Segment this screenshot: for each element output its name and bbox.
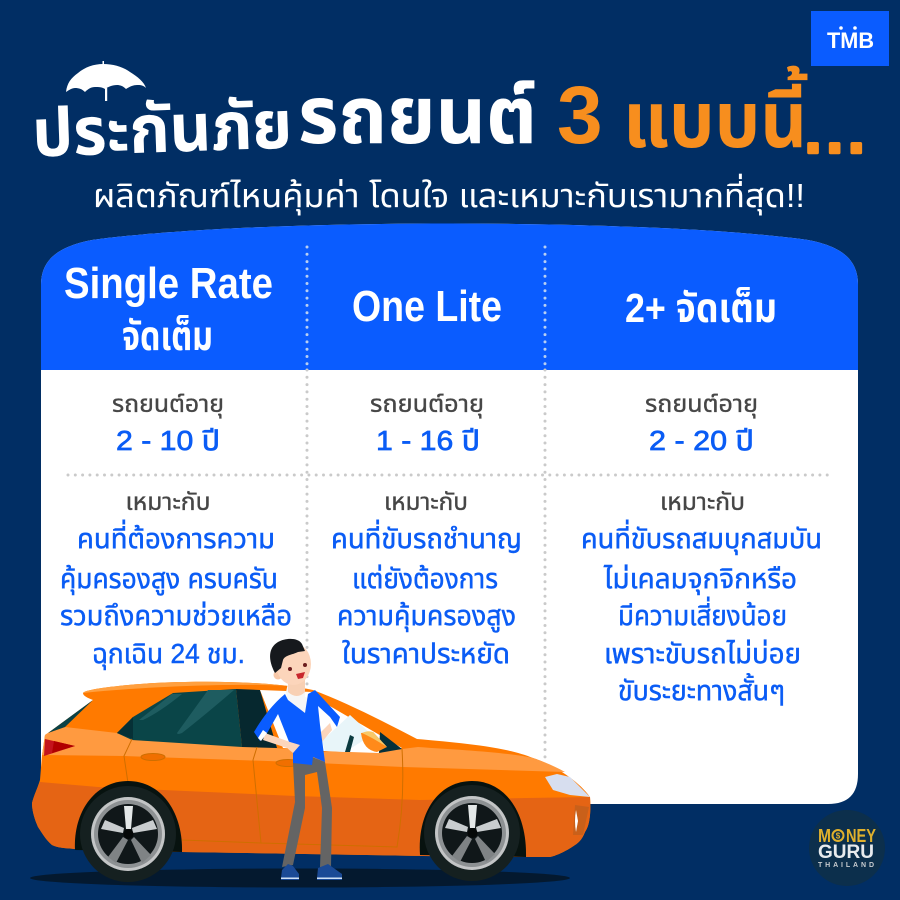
column 1 details: คุ้มครองสูง ครบครัน — [60, 563, 278, 596]
side windows — [117, 689, 402, 753]
column 2 details: รถยนต์อายุ — [370, 391, 484, 419]
logo: Money Guru Thailand — [809, 810, 885, 886]
rear wheel — [75, 781, 182, 882]
headlight — [545, 774, 590, 797]
column 2 details: แต่ยังต้องการ — [352, 563, 498, 594]
column 1 details: ฉุกเฉิน 24 ชม. — [92, 638, 245, 670]
column 2 details — [331, 391, 522, 669]
title: แบบนี้ — [623, 66, 808, 164]
column 2 details: ความคุ้มครองสูง — [337, 600, 516, 633]
side mirror — [361, 732, 387, 752]
left forearm and hand — [263, 733, 300, 753]
column 2 details: ในราคาประหยัด — [342, 638, 510, 669]
column heading: One Lite: One Lite — [352, 282, 502, 331]
title: 3 — [557, 70, 603, 161]
column 3 details: มีความเสี่ยงน้อย — [618, 596, 787, 631]
column 3 details: ขับระยะทางสั้นๆ — [618, 673, 785, 706]
column 3 details — [581, 391, 822, 706]
illustration: orange car — [32, 682, 590, 882]
jacket — [254, 690, 340, 765]
head — [274, 643, 311, 685]
column 1 details: 2 - 10 ปี — [116, 425, 220, 456]
logo: Money Guru Thailand: $ — [836, 832, 841, 840]
column 3 details: ไม่เคลมจุกจิกหรือ — [603, 563, 797, 595]
column 2 details: 1 - 16 ปี — [376, 425, 480, 456]
column 3 details: เพราะขับรถไม่บ่อย — [604, 638, 801, 669]
rear windshield — [48, 700, 93, 733]
column 3 details: รถยนต์อายุ — [645, 391, 758, 419]
logo: Money Guru Thailand: M — [818, 826, 831, 846]
panel: comparison table — [41, 224, 858, 804]
column heading: Single Rate: Single Rate — [64, 259, 273, 308]
column heading: Single Rate — [64, 259, 273, 359]
column 3 details: คนที่ขับรถสมบุกสมบัน — [581, 519, 822, 555]
illustration: man in blue jacket — [254, 639, 342, 880]
icon: umbrella — [66, 61, 146, 101]
right forearm — [320, 723, 332, 742]
front wheel — [420, 781, 526, 881]
subtitle: ผลิตภัณฑ์ไหนคุ้มค่า โดนใจ และเหมาะกับเรามากที่สุด!! — [93, 173, 805, 216]
title: ประกันภัย — [31, 87, 293, 172]
ground shadow — [30, 868, 570, 888]
column heading: Single Rate: จัดเต็ม — [122, 313, 213, 359]
column 3 details: 2 - 20 ปี — [649, 425, 754, 456]
column 1 details — [60, 391, 292, 670]
column 2 details: เหมาะกับ — [384, 489, 468, 516]
title — [31, 66, 870, 172]
column 1 details: รถยนต์อายุ — [112, 391, 224, 419]
hair — [270, 639, 305, 673]
door lines and handles — [124, 739, 403, 847]
logo: Money Guru Thailand: THAILAND — [818, 862, 874, 869]
column 2 details: คนที่ขับรถชำนาญ — [331, 519, 522, 554]
column 1 details: เหมาะกับ — [126, 489, 210, 516]
logo: TMB: TMB — [827, 28, 874, 53]
column 1 details: คนที่ต้องการความ — [77, 519, 275, 554]
title: รถยนต์ — [298, 71, 537, 160]
title: ... — [805, 100, 870, 166]
shoes — [281, 864, 342, 880]
column 3 details: เหมาะกับ — [660, 489, 745, 516]
tail light — [44, 739, 75, 756]
logo: Money Guru Thailand: GURU — [818, 842, 874, 863]
neck and shirt — [286, 683, 308, 713]
column heading: 2+: 2+ จัดเต็ม — [625, 285, 777, 331]
logo: Money Guru Thailand: NEY — [846, 826, 876, 846]
trousers — [282, 757, 332, 867]
face — [288, 663, 307, 679]
logo: TMB — [811, 11, 889, 66]
column 1 details: รวมถึงความช่วยเหลือ — [60, 600, 292, 631]
